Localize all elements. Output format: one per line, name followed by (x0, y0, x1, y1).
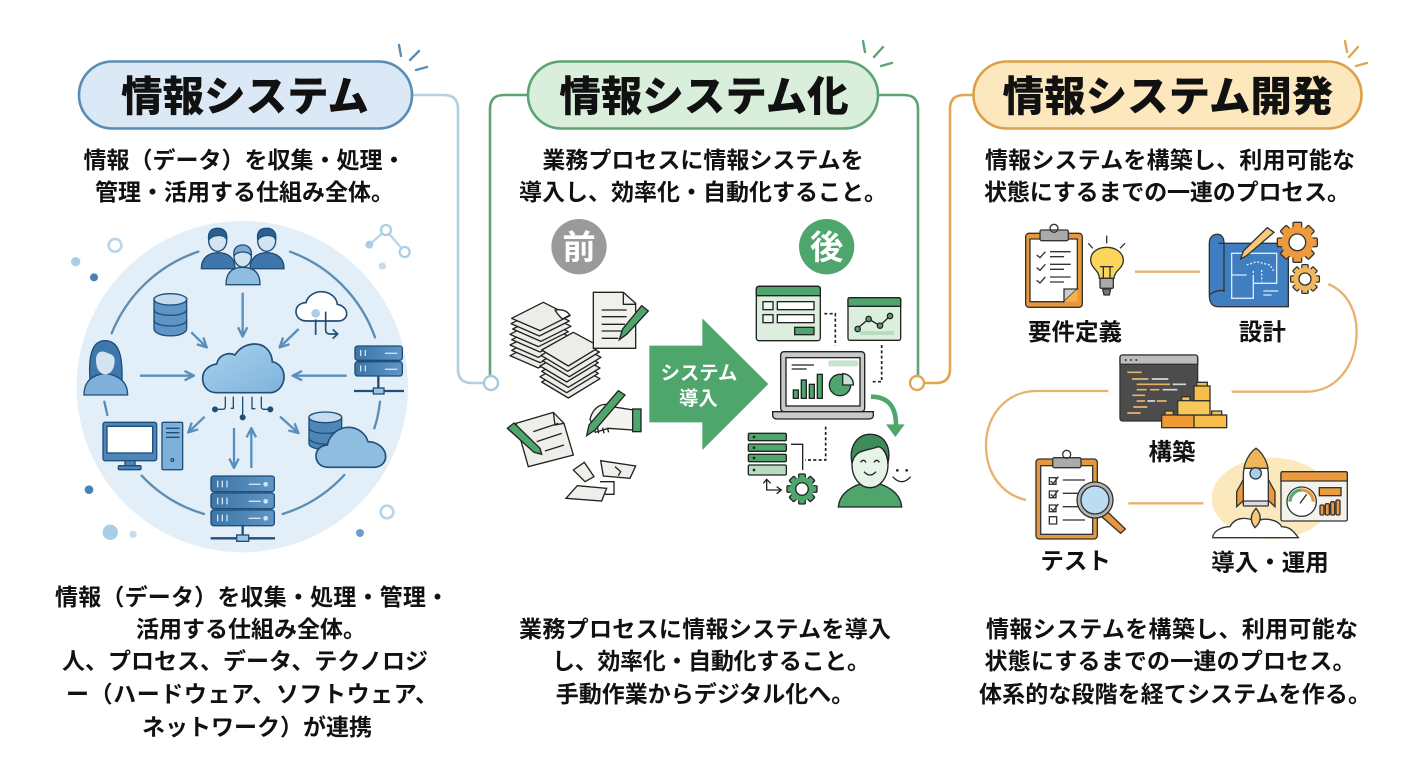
arrows to cloud (140, 293, 347, 468)
detail text: 情報システム開発 (979, 616, 1371, 707)
summary text (519, 147, 887, 205)
icon: paper stack 2 (540, 332, 601, 398)
step: 設計 (1209, 222, 1319, 345)
summary text (984, 147, 1355, 205)
connector: green left (490, 95, 528, 376)
icon: smiling person (838, 434, 911, 507)
step: 要件定義: 要件定義 (1028, 319, 1122, 345)
heading pill: 情報システム開発: 情報システム開発 (1003, 73, 1333, 120)
summary text: 状態にするまでの一連のプロセス。 (984, 179, 1350, 205)
icon: laptop dashboard (773, 352, 873, 419)
detail text: 情報システム (55, 584, 449, 740)
dashed links (805, 314, 882, 460)
big arrow: システム導入 (649, 318, 768, 450)
detail text: 情報システム化: し、効率化・自動化すること。 (552, 648, 870, 674)
icon: outline cloud (296, 292, 347, 339)
panel: 情報システム (55, 45, 449, 740)
badge: 後: 後 (810, 230, 843, 267)
heading pill: 情報システム (79, 62, 412, 128)
detail text: 情報システム開発: 状態にするまでの一連のプロセス。 (984, 648, 1356, 674)
curved green arrow (871, 397, 905, 437)
icon: desktop computer (103, 422, 183, 470)
spark lines (1345, 41, 1367, 66)
connector: green right (878, 95, 918, 376)
detail text: 情報システム: ー（ハードウェア、ソフトウェア、 (66, 681, 438, 707)
detail text: 情報システム開発: 体系的な段階を経てシステムを作る。 (979, 681, 1371, 707)
icon: database and cloud (309, 412, 386, 467)
badge: 前 (551, 219, 607, 274)
summary text: 管理・活用する仕組み全体。 (95, 179, 394, 205)
step: 導入・運用 (1211, 448, 1347, 575)
detail text: 情報システム: ネットワーク）が連携 (142, 714, 372, 740)
step: 要件定義 (1026, 224, 1125, 345)
icon: document and pencil (593, 292, 648, 348)
icon: paper and pencil (507, 412, 573, 467)
before and after diagram (507, 219, 911, 507)
step: 導入・運用: 導入・運用 (1211, 549, 1329, 575)
icon: paper stack 1 (510, 302, 571, 368)
icon: users (201, 228, 284, 285)
decorative dots (71, 225, 410, 540)
spark lines (399, 45, 427, 70)
detail text: 情報システム化: 手動作業からデジタル化へ。 (556, 681, 854, 707)
step: 構築 (1120, 355, 1227, 465)
process connectors (986, 272, 1357, 503)
step: 構築: 構築 (1149, 439, 1195, 465)
panel: 情報システム化 (507, 41, 911, 707)
big arrow: システム導入: 導入 (679, 387, 718, 410)
step: 設計: 設計 (1239, 319, 1286, 345)
icon: chart window (848, 298, 901, 340)
detail text: 情報システム: 活用する仕組み全体。 (136, 616, 366, 642)
panel: 情報システム開発 (974, 41, 1371, 707)
icon: writing hand (587, 391, 641, 436)
detail text: 情報システム: 人、プロセス、データ、テクノロジ (62, 648, 428, 674)
step: テスト (1036, 450, 1125, 574)
icon: woman (84, 341, 128, 395)
icon: central cloud (203, 344, 284, 420)
summary text (84, 147, 406, 205)
heading pill: 情報システム化 (528, 62, 878, 128)
summary text: 業務プロセスに情報システムを (542, 147, 864, 173)
heading pill: 情報システム: 情報システム (121, 73, 369, 120)
connector node: orange (910, 376, 924, 390)
connector: blue to green (412, 95, 484, 383)
icon: rack server right (354, 346, 404, 394)
connector: orange (924, 95, 973, 383)
heading pill: 情報システム化: 情報システム化 (559, 73, 849, 120)
connector node: blue (484, 376, 498, 390)
detail text: 情報システム化: 業務プロセスに情報システムを導入 (519, 616, 891, 642)
spark lines (863, 41, 892, 66)
icon: torn paper (566, 461, 636, 501)
detail text: 情報システム: 情報（データ）を収集・処理・管理・ (55, 584, 449, 610)
detail text: 情報システム化 (519, 616, 891, 707)
detail text: 情報システム開発: 情報システムを構築し、利用可能な (986, 616, 1358, 642)
big arrow: システム導入: システム (661, 364, 737, 385)
ring arcs (104, 252, 380, 514)
process diagram (986, 222, 1357, 575)
icon: servers and gear (748, 433, 817, 504)
icon: form window (756, 286, 820, 341)
summary text: 情報（データ）を収集・処理・ (84, 147, 406, 173)
icon: database (154, 294, 187, 336)
heading pill: 情報システム開発 (974, 62, 1362, 128)
badge: 後 (799, 219, 854, 274)
step: テスト: テスト (1040, 548, 1111, 574)
summary text: 導入し、効率化・自動化すること。 (519, 179, 887, 205)
badge: 前: 前 (562, 230, 596, 267)
icon: main server (211, 476, 275, 541)
network diagram (71, 221, 410, 552)
summary text: 情報システムを構築し、利用可能な (985, 147, 1355, 173)
